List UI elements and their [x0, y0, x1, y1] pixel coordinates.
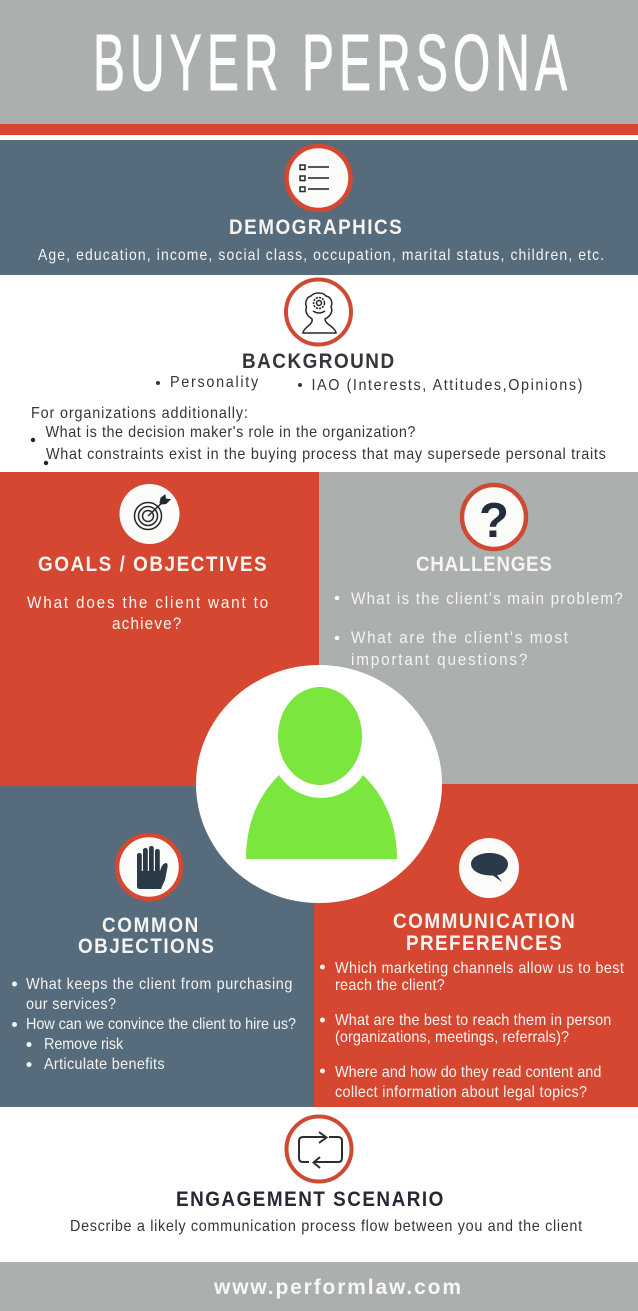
heading: common objections — [78, 914, 214, 958]
panel: engagement scenario — [70, 1116, 583, 1235]
persona head — [278, 687, 362, 785]
heading: challenges: CHALLENGES — [416, 553, 552, 576]
bullet: main problem: What is the client's main problem? — [351, 589, 623, 608]
icon: raised hand — [117, 835, 181, 899]
bullet: IAO: IAO (Interests, Attitudes,Opinions) — [312, 376, 582, 394]
footer URL: www.performlaw.com — [213, 1276, 461, 1299]
red stripe — [0, 124, 638, 135]
panel: footer — [0, 1262, 638, 1311]
bullet: constraints: What constraints exist in the buying process that may supersede personal traits — [46, 445, 606, 463]
sub-bullet: remove risk: Remove risk — [44, 1035, 124, 1053]
bullet: purchasing: our services? — [26, 995, 116, 1013]
icon: speech bubble — [459, 838, 519, 898]
engagement description: Describe a likely communication process flow between you and the client — [70, 1217, 583, 1235]
bullet: purchasing — [12, 975, 292, 1013]
bullet: reach in person — [320, 1011, 611, 1046]
bullet: marketing channels — [320, 959, 625, 994]
heading: communication preferences — [393, 910, 575, 955]
icon: repeat arrows — [286, 1116, 352, 1182]
icon: target — [120, 484, 180, 544]
panel: demographics — [0, 140, 638, 275]
panel: goals and objectives — [0, 472, 319, 786]
goals description: What does the client want to — [27, 593, 268, 612]
bullet: personality: Personality — [170, 373, 259, 391]
bullet: purchasing: What keeps the client from purchasing — [26, 975, 292, 993]
bullet: marketing channels: Which marketing channels allow us to best — [335, 959, 625, 977]
bullet: reach in person: (organizations, meetings, referrals)? — [335, 1028, 569, 1046]
icon: checklist — [286, 146, 350, 210]
bullet: important questions: What are the client's most — [351, 628, 568, 647]
panel: header — [0, 0, 638, 124]
panel: background — [31, 280, 606, 465]
bullet: important questions — [335, 628, 568, 669]
bullet: read content: collect information about legal topics? — [335, 1083, 587, 1101]
heading: demographics: DEMOGRAPHICS — [229, 216, 402, 239]
heading: engagement scenario: ENGAGEMENT SCENARIO — [176, 1188, 443, 1211]
bullet: important questions: important questions? — [351, 650, 527, 669]
sub-bullet: articulate benefits: Articulate benefits — [44, 1055, 165, 1073]
panel: challenges — [319, 472, 638, 784]
bullet: read content — [320, 1063, 601, 1101]
organizations intro: For organizations additionally: — [31, 404, 248, 422]
goals description: achieve? — [112, 614, 181, 633]
heading: communication preferences: COMMUNICATION — [393, 910, 575, 933]
bullet: convince: How can we convince the client to hire us? — [26, 1015, 296, 1033]
bullet: reach in person: What are the best to reach them in person — [335, 1011, 611, 1029]
heading: communication preferences: PREFERENCES — [406, 932, 562, 955]
bullet: marketing channels: reach the client? — [335, 976, 445, 994]
bullet: decision maker: What is the decision maker's role in the organization? — [46, 423, 415, 441]
heading: common objections: OBJECTIONS — [78, 935, 214, 958]
icon: question mark — [462, 485, 526, 549]
demographics description: Age, education, income, social class, occupation, marital status, children, etc. — [38, 247, 604, 264]
panel: common objections — [0, 786, 314, 1107]
heading: common objections: COMMON — [102, 914, 198, 937]
central persona figure — [196, 665, 442, 903]
bullet: read content: Where and how do they read content and — [335, 1063, 601, 1081]
heading: background: BACKGROUND — [242, 350, 394, 373]
title: BUYER PERSONA — [93, 17, 567, 107]
persona body — [246, 775, 397, 859]
panel: communication preferences — [314, 784, 638, 1107]
heading: goals: GOALS / OBJECTIVES — [38, 553, 267, 576]
goals description — [27, 593, 268, 633]
icon: head with gear — [286, 280, 351, 344]
icon: question mark: ? — [479, 494, 509, 548]
